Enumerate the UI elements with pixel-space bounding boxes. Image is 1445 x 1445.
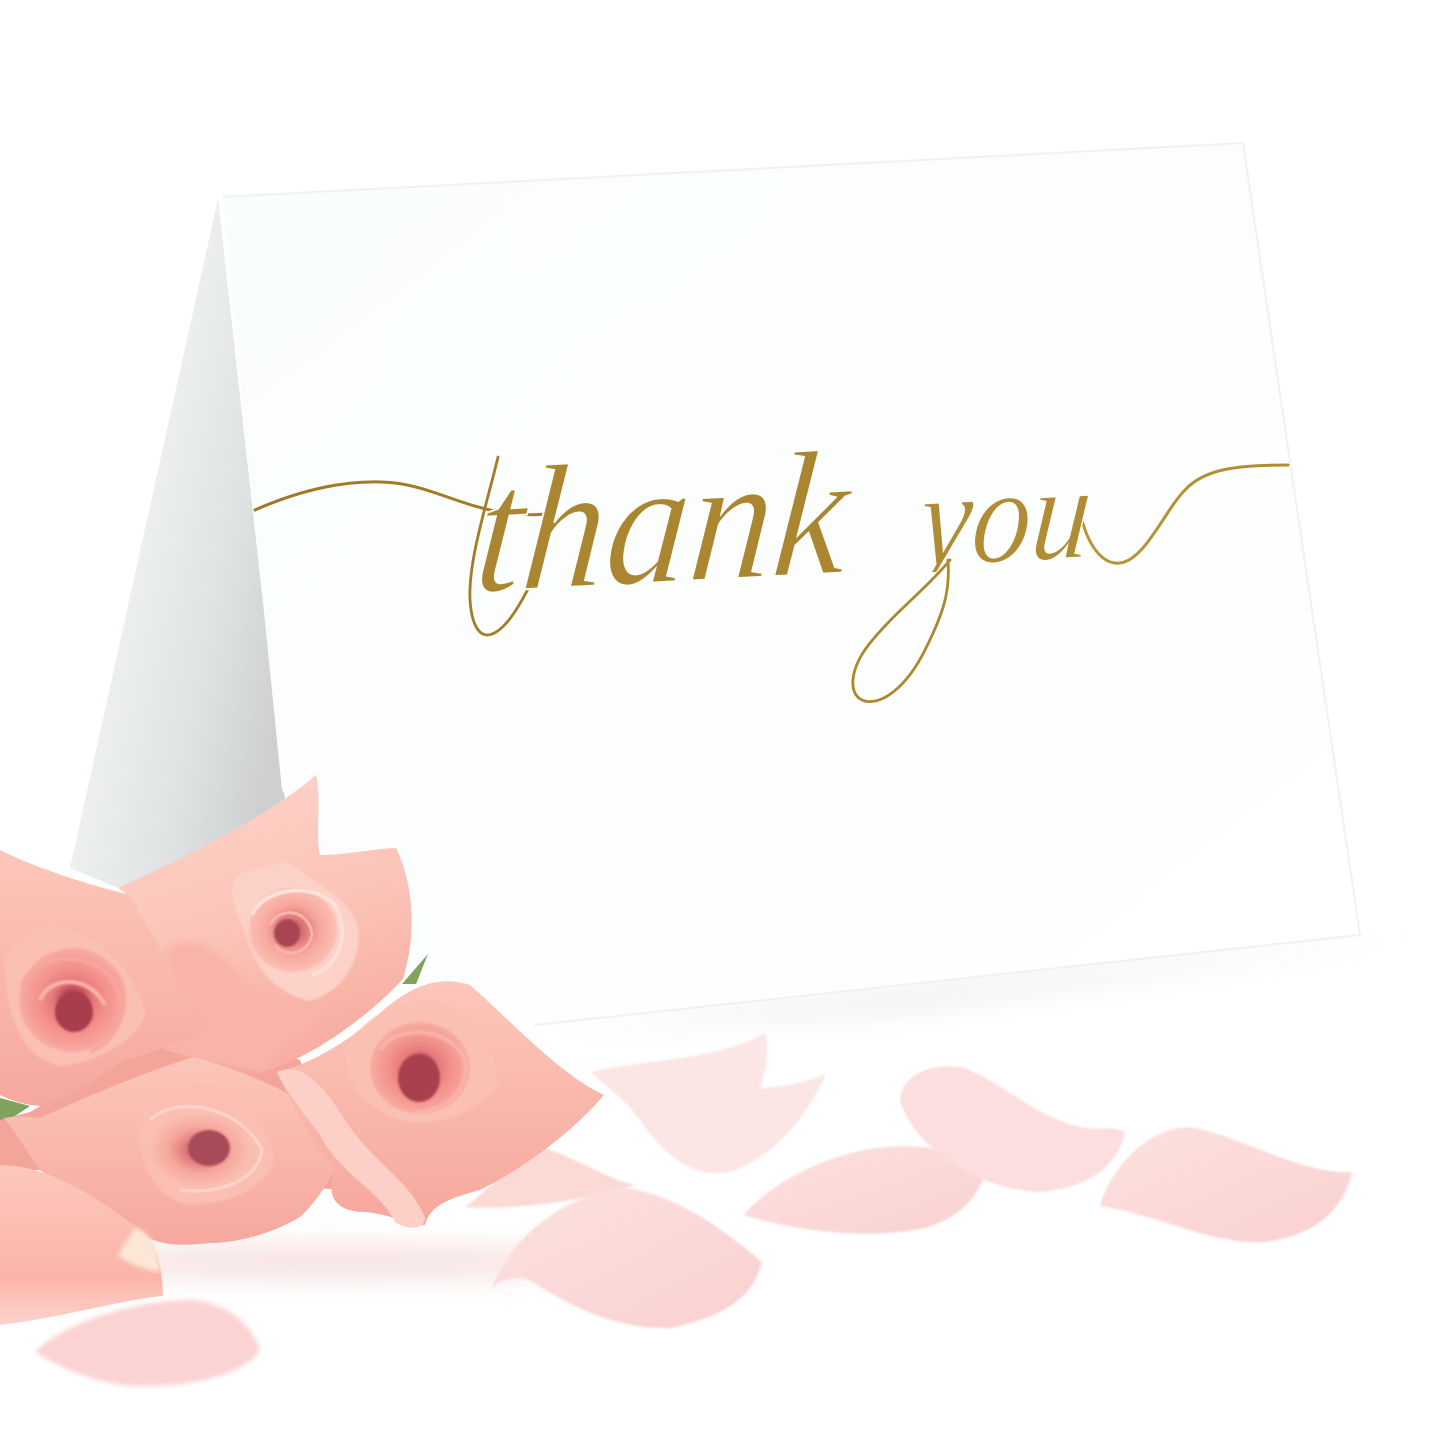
rose: far left bbox=[0, 850, 207, 1106]
petal: behind roses bbox=[465, 1148, 635, 1208]
petal cream highlight bbox=[118, 1228, 160, 1272]
leaves bbox=[0, 954, 428, 1122]
petal: far right bbox=[1100, 1127, 1352, 1242]
petal: pale back centre bbox=[590, 1033, 826, 1173]
petal: upper right bbox=[900, 1067, 1125, 1192]
greeting card bbox=[70, 143, 1360, 1025]
petal: middle bbox=[743, 1146, 992, 1234]
rose: right bbox=[277, 981, 604, 1228]
head bbox=[232, 862, 359, 1001]
rose: bottom left bbox=[4, 1057, 340, 1245]
petal: large centre bbox=[492, 1188, 762, 1328]
lower bud shade bbox=[166, 942, 330, 1070]
rose petal lower left bbox=[0, 1165, 163, 1325]
petal: bottom left bbox=[35, 1300, 260, 1386]
word: thank: thank bbox=[469, 413, 860, 631]
word: you: you bbox=[903, 437, 1098, 597]
card shadow on table bbox=[535, 938, 1395, 1032]
rose: top centre bbox=[118, 775, 412, 1072]
y descender loop bbox=[853, 560, 950, 702]
rose bouquet bbox=[0, 775, 604, 1325]
loose petals bbox=[35, 1033, 1352, 1386]
left swash bbox=[255, 482, 553, 515]
bouquet backing bbox=[0, 1030, 345, 1190]
right swash bbox=[1082, 465, 1288, 563]
t flourish bbox=[470, 457, 545, 635]
gold thank you lettering bbox=[253, 451, 1290, 703]
shadow under roses bbox=[50, 1246, 610, 1278]
card fold side panel bbox=[70, 199, 285, 905]
card front panel bbox=[222, 143, 1360, 1025]
side petal strip bbox=[277, 1069, 425, 1228]
